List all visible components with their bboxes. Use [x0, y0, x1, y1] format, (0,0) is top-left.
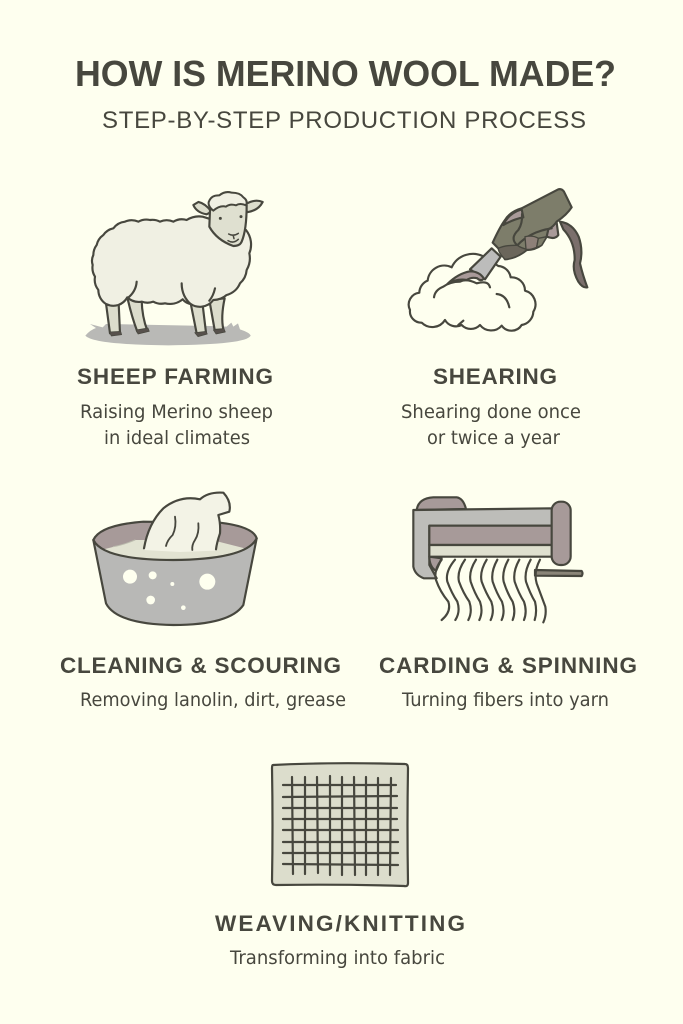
icon: sheep [85, 192, 263, 345]
step 2: shearing: or twice a year [427, 427, 560, 449]
icon: carding machine [413, 497, 582, 622]
step 5: weaving and knitting: WEAVING/KNITTING [215, 911, 465, 936]
title: HOW IS MERINO WOOL MADE? [75, 53, 616, 94]
step 1: sheep farming: SHEEP FARMING [77, 364, 273, 389]
step 4: carding and spinning [379, 653, 637, 711]
step 4: carding and spinning: CARDING & SPINNING [379, 653, 637, 678]
step 5: weaving and knitting: Transforming into fabric [229, 947, 445, 969]
step 2: shearing: Shearing done once [401, 401, 581, 423]
icon: shearing [409, 189, 587, 331]
step 4: carding and spinning: Turning fibers into yarn [401, 689, 609, 711]
step 1: sheep farming: Raising Merino sheep [80, 401, 273, 423]
icon: washing tub [93, 493, 257, 625]
step 2: shearing: SHEARING [433, 364, 557, 389]
subtitle: STEP-BY-STEP PRODUCTION PROCESS [102, 107, 586, 134]
step 3: cleaning and scouring: Removing lanolin, dirt, grease [80, 689, 346, 711]
step 5: weaving and knitting [215, 911, 465, 969]
step 2: shearing [401, 364, 581, 449]
step 1: sheep farming [77, 364, 273, 449]
step 3: cleaning and scouring [60, 653, 346, 711]
step 3: cleaning and scouring: CLEANING & SCOURING [60, 653, 341, 678]
step 1: sheep farming: in ideal climates [104, 427, 250, 449]
icon: woven fabric [272, 763, 408, 886]
